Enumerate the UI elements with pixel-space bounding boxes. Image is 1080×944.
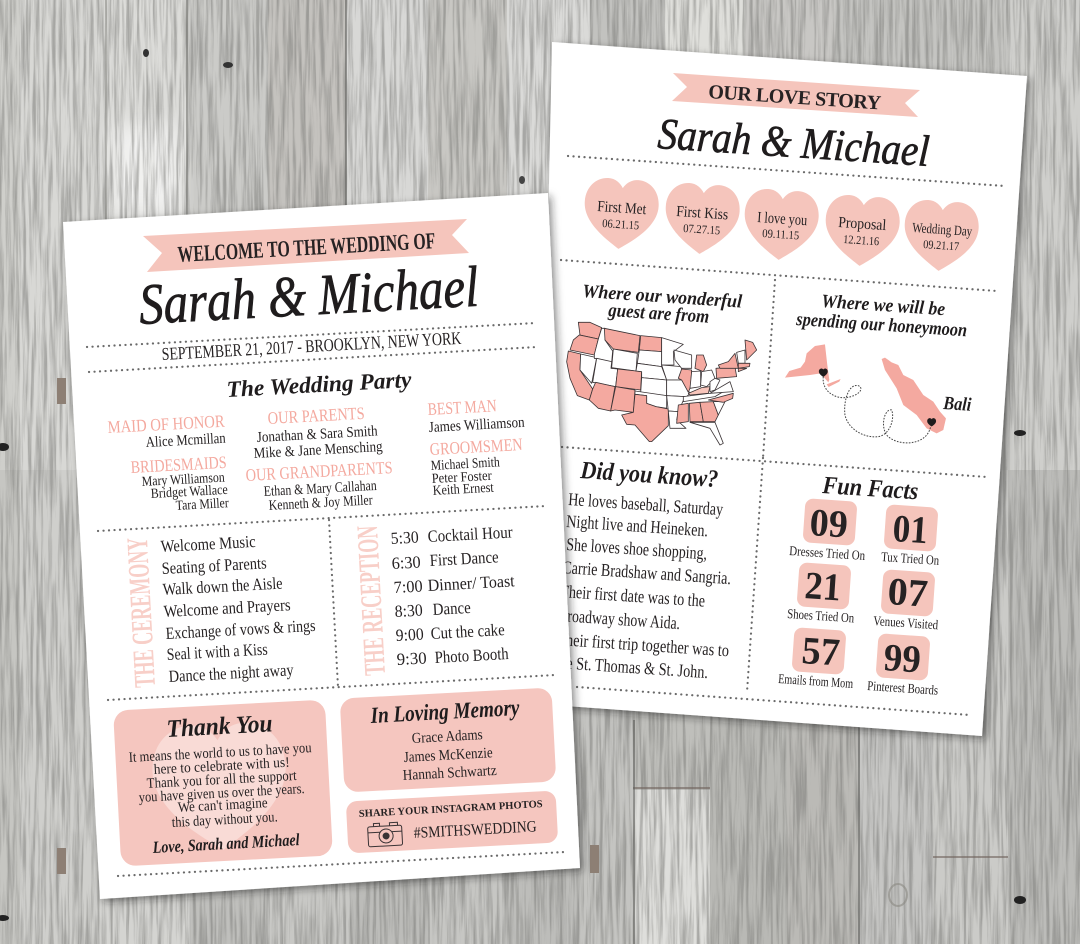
- fact: dresses: Dresses Tried On: [789, 543, 866, 563]
- reception schedule: First Dance: [429, 547, 499, 570]
- heart: first kiss: [663, 182, 741, 256]
- heart: i love you: I love you: [757, 209, 808, 229]
- ceremony vertical heading: THE CEREMONY: [121, 537, 162, 688]
- thank you message: We can't imagine: [177, 795, 268, 816]
- facts text: Broadway show Aida.: [558, 605, 681, 633]
- wedding party: right column: Michael Smith: [430, 455, 500, 474]
- heart: proposal: Proposal: [838, 214, 887, 234]
- fact: shoes: [787, 562, 855, 625]
- thank you message: [128, 740, 312, 831]
- reception schedule: Cocktail Hour: [427, 522, 513, 546]
- heading: Fun Facts: [821, 472, 919, 505]
- wedding party: middle column: Jonathan & Sara Smith: [256, 423, 378, 446]
- wedding party: middle column: Kenneth & Joy Miller: [268, 492, 373, 514]
- heading: guest map: guest are from: [607, 300, 710, 328]
- heart: first met: [582, 177, 660, 251]
- ceremony list: [160, 532, 316, 686]
- wedding party: right column: GROOMSMEN: [429, 434, 523, 459]
- wedding party: middle column: Mike & Jane Mensching: [253, 439, 383, 462]
- heart: first met: First Met: [597, 198, 647, 218]
- ceremony list: Walk down the Aisle: [162, 574, 283, 599]
- panel: thank you: [113, 700, 333, 866]
- wedding party: middle column: [245, 403, 393, 514]
- facts text: Their first date was to the: [560, 581, 706, 611]
- hashtag: #SMITHSWEDDING: [413, 818, 537, 842]
- heart: i love you: 09.11.15: [762, 226, 800, 242]
- heading: Did you know?: [579, 457, 719, 493]
- fact: dresses: [789, 498, 866, 563]
- reception schedule: Dance: [432, 598, 471, 619]
- heart: first kiss: First Kiss: [676, 203, 729, 223]
- honeymoon map: new york to bali: [785, 344, 946, 443]
- fact: pinterest: [867, 633, 939, 698]
- heart: i love you: [742, 188, 820, 262]
- timeline hearts: [582, 177, 980, 273]
- fact: pinterest: 99: [882, 636, 922, 681]
- heading: honeymoon: spending our honeymoon: [795, 309, 968, 341]
- wedding party: left column: Bridget Wallace: [150, 483, 228, 502]
- card sheet: [63, 193, 580, 899]
- fact: shoes: 21: [803, 564, 842, 609]
- wedding party: left column: [107, 411, 229, 514]
- fact: venues: 07: [886, 570, 929, 616]
- event date and place: SEPTEMBER 21, 2017 - BROOKLYN, NEW YORK: [161, 328, 462, 364]
- ceremony list: Dance the night away: [168, 660, 294, 686]
- memory names: Grace Adams: [411, 727, 483, 747]
- fact: tux: 01: [891, 507, 929, 552]
- reception schedule: 9:30: [396, 648, 427, 669]
- wedding party: left column: BRIDESMAIDS: [130, 452, 227, 477]
- reception schedule: 7:00: [393, 576, 423, 597]
- ceremony list: Exchange of vows & rings: [165, 616, 316, 643]
- facts text: Their first trip together was to: [557, 629, 730, 660]
- facts text: He loves baseball, Saturday: [568, 489, 724, 519]
- heading: honeymoon: [795, 291, 968, 341]
- thank you message: here to celebrate with us!: [153, 755, 290, 778]
- wedding party: left column: Tara Miller: [175, 496, 229, 514]
- wedding party: right column: [427, 395, 526, 499]
- reception vertical heading: THE RECEPTION: [351, 525, 392, 676]
- island shape: [882, 358, 946, 433]
- ceremony list: Seating of Parents: [161, 553, 267, 578]
- reception schedule: Cut the cake: [430, 620, 505, 643]
- reception schedule: Dinner/ Toast: [427, 571, 515, 595]
- ribbon banner: [672, 73, 920, 117]
- memory names: James McKenzie: [403, 745, 493, 766]
- facts text: Carrie Bradshaw and Sangria.: [562, 557, 732, 588]
- fact: tux: Tux Tried On: [881, 549, 940, 568]
- facts text: [555, 489, 732, 682]
- heart: first met: 06.21.15: [602, 216, 640, 232]
- heart: proposal: 12.21.16: [843, 232, 880, 248]
- wedding party: middle column: OUR PARENTS: [267, 403, 365, 428]
- bali label: Bali: [942, 393, 973, 416]
- heart: wedding day: 09.21.17: [923, 237, 960, 253]
- fact: tux: [881, 504, 940, 568]
- names script: Sarah & Michael: [137, 254, 480, 337]
- fact: emails: [778, 627, 854, 691]
- fact: dresses: 09: [808, 501, 849, 546]
- fact: venues: Venues Visited: [873, 613, 939, 632]
- reception schedule: Photo Booth: [434, 644, 510, 667]
- left card: wedding program: [63, 193, 580, 899]
- heading: guest map: Where our wonderful: [582, 281, 743, 313]
- thank you message: this day without you.: [171, 809, 278, 831]
- wedding party: right column: James Williamson: [428, 415, 526, 436]
- ceremony list: Welcome and Prayers: [163, 595, 291, 621]
- heart: proposal: [823, 194, 901, 268]
- wedding party: left column: Alice Mcmillan: [145, 431, 227, 451]
- fact: emails: 57: [800, 629, 841, 674]
- memory names: [402, 727, 497, 784]
- panel: in loving memory: [340, 688, 556, 792]
- card sheet: [538, 42, 1027, 736]
- ceremony list: Seal it with a Kiss: [166, 640, 268, 664]
- memory heading: In Loving Memory: [369, 695, 521, 728]
- signature: Love, Sarah and Michael: [151, 830, 300, 857]
- heading: wedding party: The Wedding Party: [226, 367, 413, 402]
- dotted flight path: [823, 377, 931, 443]
- fun facts panel: [778, 472, 940, 698]
- wedding party: right column: Keith Ernest: [432, 481, 494, 499]
- fact: shoes: Shoes Tried On: [787, 606, 855, 625]
- wedding party: middle column: Ethan & Mary Callahan: [263, 478, 378, 500]
- reception schedule: 9:00: [395, 625, 424, 645]
- us map of guest states: [567, 322, 757, 445]
- heading: guest map: [582, 281, 743, 328]
- facts text: Night live and Heineken.: [566, 511, 709, 540]
- pale heart backdrop: [150, 721, 290, 853]
- thank you message: It means the world to us to have you: [128, 740, 312, 766]
- location hearts: [819, 368, 936, 427]
- panel: instagram: [346, 791, 558, 853]
- instagram prompt: SHARE YOUR INSTAGRAM PHOTOS: [359, 799, 543, 820]
- wedding party: left column: MAID OF HONOR: [107, 411, 225, 437]
- ribbon banner: [143, 219, 469, 272]
- banner title: OUR LOVE STORY: [708, 81, 882, 114]
- thank you message: you have given us over the years.: [138, 781, 305, 806]
- thank you message: Thank you for all the support: [146, 768, 297, 792]
- wedding party: right column: BEST MAN: [427, 395, 497, 419]
- names script: Sarah & Michael: [656, 109, 931, 176]
- facts text: She loves shoe shopping,: [566, 534, 708, 563]
- thank you heading: Thank You: [166, 710, 273, 743]
- heart: first kiss: 07.27.15: [683, 221, 721, 237]
- new york shape: [785, 344, 829, 382]
- reception schedule: 6:30: [391, 552, 421, 573]
- banner title: WELCOME TO THE WEDDING OF: [177, 228, 436, 267]
- reception schedule: [390, 522, 515, 669]
- icon: camera: [367, 822, 403, 847]
- memory names: Hannah Schwartz: [402, 763, 497, 784]
- fact: emails: Emails from Mom: [778, 671, 854, 691]
- reception schedule: 8:30: [394, 601, 423, 621]
- fact: pinterest: Pinterest Boards: [867, 678, 939, 698]
- reception schedule: 5:30: [390, 528, 419, 548]
- wedding party: right column: Peter Foster: [431, 469, 492, 487]
- ceremony list: Welcome Music: [160, 532, 256, 556]
- heart: wedding day: [902, 199, 980, 273]
- wedding party: left column: Mary Williamson: [141, 471, 225, 490]
- did you know panel: [555, 457, 732, 682]
- fact: venues: [873, 569, 939, 632]
- wedding party: middle column: OUR GRANDPARENTS: [245, 457, 393, 485]
- heading: honeymoon: Where we will be: [821, 291, 946, 320]
- facts text: the St. Thomas & St. John.: [555, 652, 709, 682]
- heart: wedding day: Wedding Day: [912, 221, 973, 240]
- right card: our love story: [538, 42, 1027, 736]
